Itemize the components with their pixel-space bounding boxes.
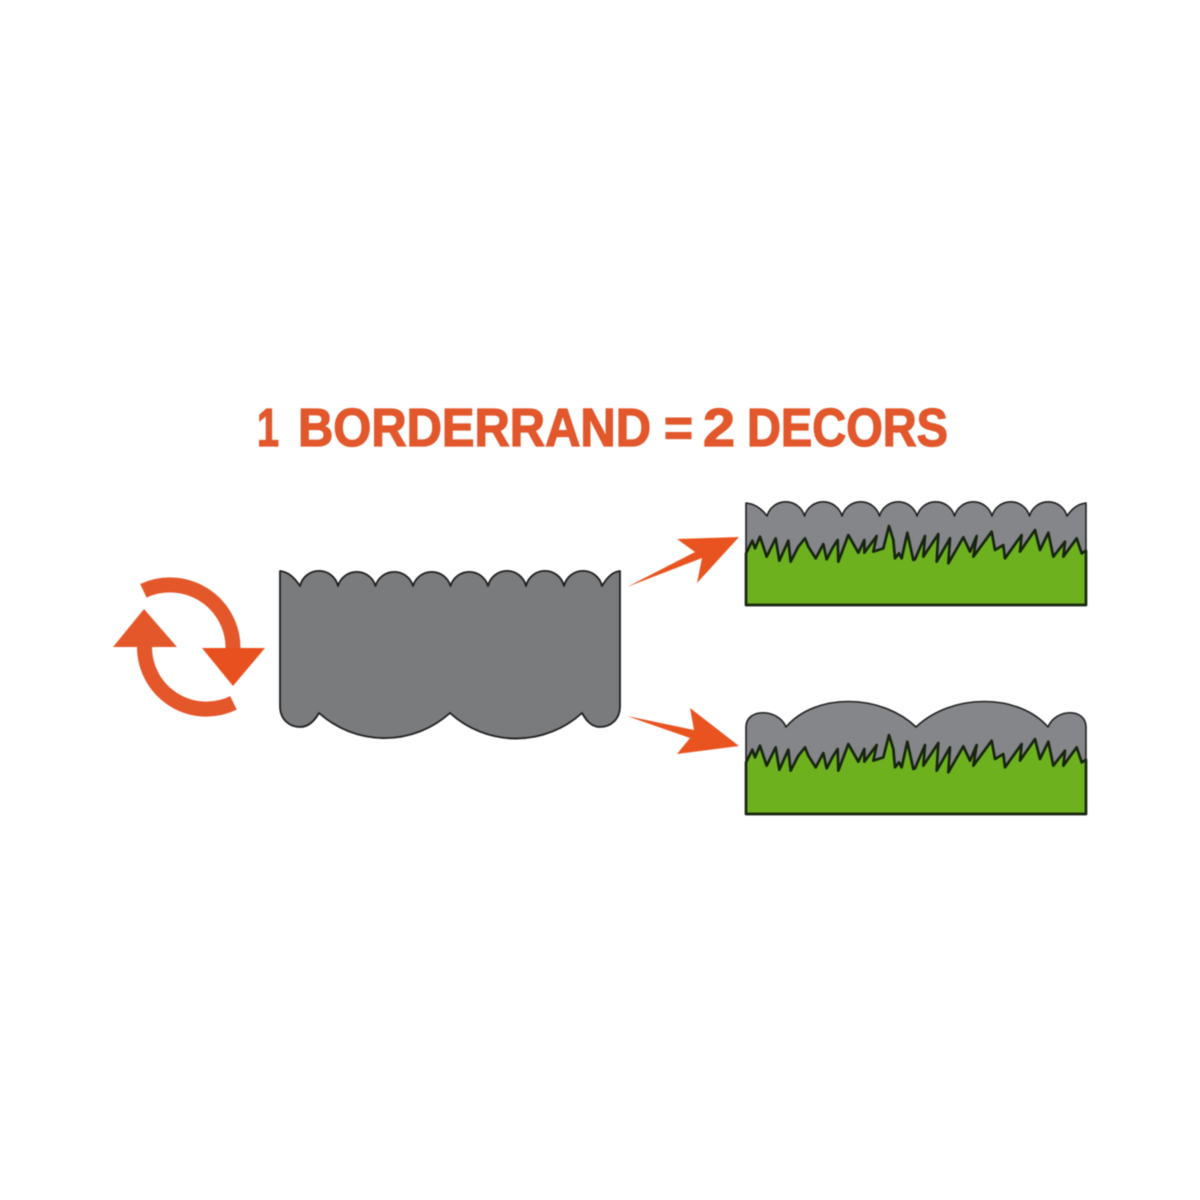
grass	[746, 526, 1086, 605]
title: BORDERRAND	[298, 398, 651, 458]
panel: large scallop decor with grass	[746, 702, 1086, 814]
border with large scallops	[746, 702, 1086, 780]
icon: reversible cycle arrows	[113, 585, 265, 709]
arrow: to large scallop decor	[627, 708, 739, 754]
panel: double-sided border edge	[280, 571, 620, 739]
panel: small scallop decor with grass	[746, 502, 1086, 605]
title: DECORS	[747, 398, 948, 458]
title: 2	[703, 398, 735, 458]
border with small scallops	[746, 502, 1086, 570]
grass	[746, 735, 1086, 814]
title: =	[664, 398, 693, 458]
arrow: to small scallop decor	[627, 537, 739, 587]
title: 1	[257, 398, 279, 458]
title	[257, 398, 948, 458]
